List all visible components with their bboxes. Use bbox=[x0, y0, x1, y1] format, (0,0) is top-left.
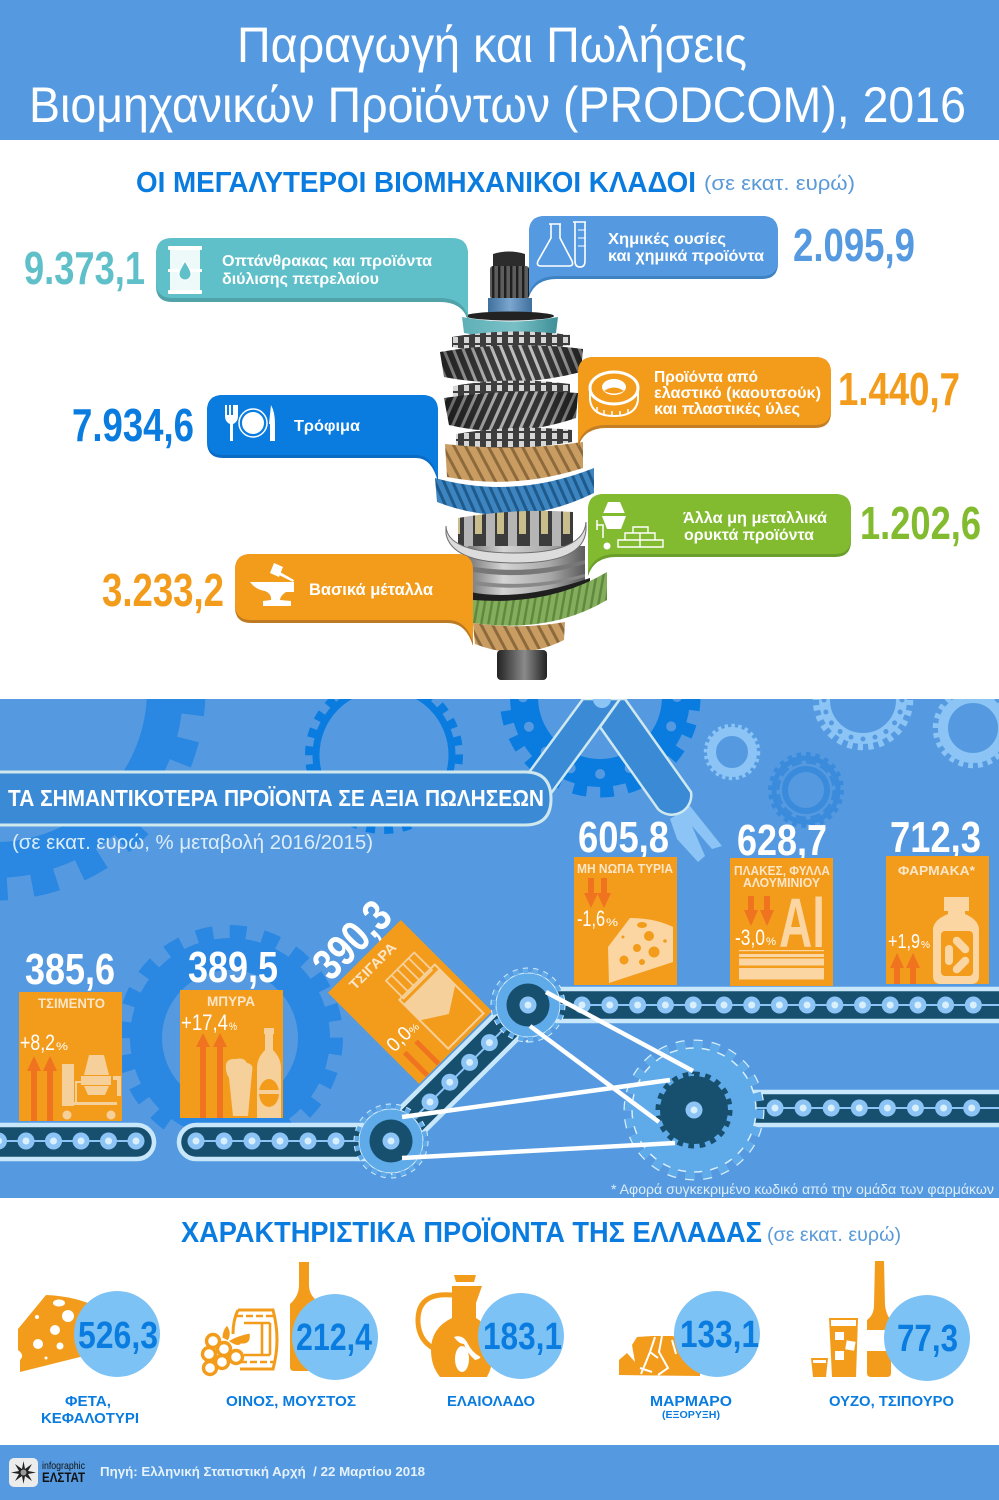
icon: cement mixer bbox=[62, 1055, 121, 1120]
callout: non-metallic minerals bbox=[588, 494, 851, 576]
product: feta, kefalotyri bbox=[18, 1291, 160, 1427]
banner: most important products heading bbox=[0, 772, 551, 825]
product box: pharmaceuticals: 712,3 bbox=[890, 813, 981, 862]
icon: flask and test tube bbox=[537, 222, 586, 267]
product box: pharmaceuticals: +1,9 bbox=[888, 931, 920, 953]
logo: ELSTAT infographic: infographic bbox=[42, 1460, 85, 1472]
robot arm bbox=[530, 690, 722, 862]
product box: cheese: % bbox=[606, 917, 618, 929]
callout: coke and refined petroleum: διύλισης πετρελαίου bbox=[222, 271, 379, 288]
arm: left segment bbox=[530, 699, 620, 792]
product box: beer: 389,5 bbox=[188, 943, 278, 992]
product box: beer bbox=[180, 943, 283, 1118]
callout: coke and refined petroleum: Οπτάνθρακας και προϊόντα bbox=[222, 253, 432, 270]
gear: large drive bbox=[628, 1044, 760, 1176]
conveyor: lower left segment bbox=[0, 1125, 154, 1159]
product box: cigarettes (tilted): % bbox=[407, 1022, 422, 1037]
icon: oil drum bbox=[168, 246, 202, 294]
conveyor: inclined segment bbox=[391, 1005, 528, 1141]
value: 7.934,6: 7.934,6 bbox=[72, 399, 194, 451]
section heading: largest industrial sectors: (σε εκατ. ευρώ) bbox=[704, 173, 855, 195]
product box: cheese bbox=[574, 813, 677, 985]
product box: cheese: ΜΗ ΝΩΠΑ ΤΥΡΙΑ bbox=[577, 861, 674, 876]
icon: pill bottle bbox=[933, 897, 979, 984]
callout: chemicals: Χημικές ουσίες bbox=[608, 231, 726, 248]
value: 2.095,9: 2.095,9 bbox=[793, 219, 915, 271]
product: wine, must bbox=[199, 1262, 378, 1410]
product: feta, kefalotyri: ΚΕΦΑΛΟΤΥΡΙ bbox=[41, 1410, 139, 1427]
callout: basic metals: Βασικά μέταλλα bbox=[309, 581, 433, 599]
claw bbox=[670, 806, 722, 862]
gear: upper pulley bbox=[494, 970, 562, 1040]
logo: ELSTAT infographic bbox=[9, 1458, 85, 1487]
product box: cigarettes (tilted): 0,0 bbox=[382, 1023, 416, 1056]
icon: plate and cutlery bbox=[225, 405, 275, 441]
product: feta, kefalotyri: ΦΕΤΑ, bbox=[65, 1393, 111, 1410]
icon: cheese wedge bbox=[608, 918, 673, 983]
value: 3.233,2: 3.233,2 bbox=[102, 564, 224, 616]
icon: anvil and hammer bbox=[250, 563, 294, 606]
product box: cement: +8,2 bbox=[20, 1030, 55, 1055]
icon: rubber ring bbox=[590, 372, 638, 416]
icon: aluminium symbol and sheets: Al bbox=[779, 884, 825, 962]
conveyor: right segment bbox=[750, 1092, 999, 1125]
callout: food: Τρόφιμα bbox=[294, 418, 360, 435]
callout: non-metallic minerals: Άλλα μη μεταλλικά bbox=[683, 510, 827, 527]
icon: cigarette pack bbox=[383, 948, 484, 1049]
product box: beer: +17,4 bbox=[181, 1010, 228, 1035]
product box: cement: % bbox=[56, 1041, 68, 1053]
product box: cement bbox=[19, 945, 122, 1121]
product box: cigarettes (tilted) bbox=[297, 889, 492, 1084]
arm: right segment bbox=[600, 699, 691, 815]
gear: lower pulley bbox=[356, 1106, 426, 1176]
section heading: largest industrial sectors: ΟΙ ΜΕΓΑΛΥΤΕΡΟΙ ΒΙΟΜΗΧΑΝΙΚΟΙ ΚΛΑΔΟΙ bbox=[136, 167, 696, 199]
footer band bbox=[0, 1445, 999, 1500]
callout: non-metallic minerals: ορυκτά προϊόντα bbox=[684, 527, 814, 544]
conveyor: upper segment bbox=[550, 989, 999, 1021]
product: ouzo, tsipouro: 77,3 bbox=[897, 1318, 958, 1360]
product box: beer: % bbox=[229, 1021, 237, 1033]
header band with title: Παραγωγή και Πωλήσεις bbox=[237, 17, 747, 73]
section heading: characteristic Greek products: (σε εκατ. ευρώ) bbox=[767, 1225, 901, 1246]
callout: rubber and plastics bbox=[578, 357, 831, 447]
product box: aluminium: 628,7 bbox=[737, 816, 827, 865]
product box: aluminium: ΠΛΑΚΕΣ, ΦΥΛΛΑ bbox=[734, 864, 830, 878]
callout: food bbox=[207, 395, 438, 482]
product box: aluminium: % bbox=[766, 936, 776, 948]
callout: rubber and plastics: ελαστικό (καουτσούκ) bbox=[654, 385, 821, 402]
callout: coke and refined petroleum bbox=[156, 238, 468, 320]
value: 9.373,1: 9.373,1 bbox=[24, 242, 145, 294]
product box: aluminium: ΑΛΟΥΜΙΝΙΟΥ bbox=[743, 876, 821, 890]
icon: beer glass and bottle bbox=[226, 1028, 281, 1118]
background gears bbox=[0, 491, 999, 1144]
icon: olive oil jug bbox=[418, 1275, 493, 1377]
icon: cement mixer and bricks bbox=[597, 502, 663, 550]
callout: chemicals: και χημικά προϊόντα bbox=[608, 248, 764, 265]
product box: aluminium bbox=[730, 816, 833, 986]
panel: top products by sales value bbox=[0, 699, 999, 1198]
product box: pharmaceuticals: ΦΑΡΜΑΚΑ* bbox=[898, 863, 976, 878]
callout: rubber and plastics: και πλαστικές ύλες bbox=[654, 401, 800, 418]
callout: rubber and plastics: Προϊόντα από bbox=[654, 369, 758, 386]
subtitle: units: (σε εκατ. ευρώ, % μεταβολή 2016/2015) bbox=[12, 832, 373, 854]
product: wine, must: 212,4 bbox=[296, 1317, 372, 1359]
product: marble bbox=[619, 1291, 760, 1421]
product box: pharmaceuticals bbox=[886, 813, 989, 984]
product: ouzo, tsipouro: ΟΥΖΟ, ΤΣΙΠΟΥΡΟ bbox=[829, 1393, 954, 1410]
icon: aluminium symbol and sheets bbox=[739, 884, 825, 980]
gearbox shaft illustration bbox=[435, 252, 607, 680]
icon: ouzo glasses and bottle bbox=[811, 1261, 891, 1377]
callout: basic metals bbox=[235, 554, 473, 646]
product: ouzo, tsipouro bbox=[811, 1261, 970, 1410]
header band with title bbox=[0, 0, 999, 140]
drive belts bbox=[402, 992, 693, 1158]
product: olive oil bbox=[418, 1275, 564, 1410]
product: marble: ΜΑΡΜΑΡΟ bbox=[650, 1393, 732, 1410]
product box: cigarettes (tilted): 390,3 bbox=[303, 891, 402, 989]
footer band: Πηγή: Ελληνική Στατιστική Αρχή / 22 Μαρτίου 2018 bbox=[100, 1464, 425, 1479]
product box: pharmaceuticals: % bbox=[921, 940, 930, 951]
product box: cheese: 605,8 bbox=[578, 813, 669, 862]
product: olive oil: ΕΛΑΙΟΛΑΔΟ bbox=[447, 1393, 535, 1410]
product: olive oil: 183,1 bbox=[483, 1316, 562, 1358]
banner: most important products heading: ΤΑ ΣΗΜΑΝΤΙΚΟΤΕΡΑ ΠΡΟΪΟΝΤΑ ΣΕ ΑΞΙΑ ΠΩΛΗΣΕΩΝ bbox=[8, 785, 544, 811]
product: wine, must: ΟΙΝΟΣ, ΜΟΥΣΤΟΣ bbox=[226, 1393, 356, 1410]
product: feta, kefalotyri: 526,3 bbox=[78, 1315, 158, 1357]
product box: cement: ΤΣΙΜΕΝΤΟ bbox=[38, 995, 105, 1011]
product: marble: (ΕΞΟΡΥΞΗ) bbox=[662, 1410, 720, 1421]
section heading: characteristic Greek products: ΧΑΡΑΚΤΗΡΙΣΤΙΚΑ ΠΡΟΪΟΝΤΑ ΤΗΣ ΕΛΛΑΔΑΣ bbox=[181, 1216, 762, 1249]
conveyor: lower middle segment bbox=[179, 1125, 375, 1159]
logo: ELSTAT infographic: ΕΛΣΤΑΤ bbox=[42, 1469, 85, 1485]
product box: aluminium: -3,0 bbox=[735, 925, 765, 950]
icon: marble blocks bbox=[619, 1336, 700, 1376]
arm joint bbox=[593, 690, 611, 708]
value: 1.440,7: 1.440,7 bbox=[838, 363, 960, 415]
icon: wine bottle, barrel and grapes bbox=[199, 1262, 316, 1376]
product box: cement: 385,6 bbox=[25, 945, 115, 994]
icon: cheese bbox=[18, 1295, 100, 1372]
callout: chemicals bbox=[529, 216, 778, 297]
product box: cheese: -1,6 bbox=[577, 906, 605, 931]
footnote: * Αφορά συγκεκριμένο κωδικό από την ομάδα των φαρμάκων bbox=[611, 1182, 994, 1197]
product: marble: 133,1 bbox=[680, 1314, 759, 1356]
product box: beer: ΜΠΥΡΑ bbox=[207, 993, 255, 1009]
product box: cigarettes (tilted): ΤΣΙΓΑΡΑ bbox=[346, 939, 399, 993]
